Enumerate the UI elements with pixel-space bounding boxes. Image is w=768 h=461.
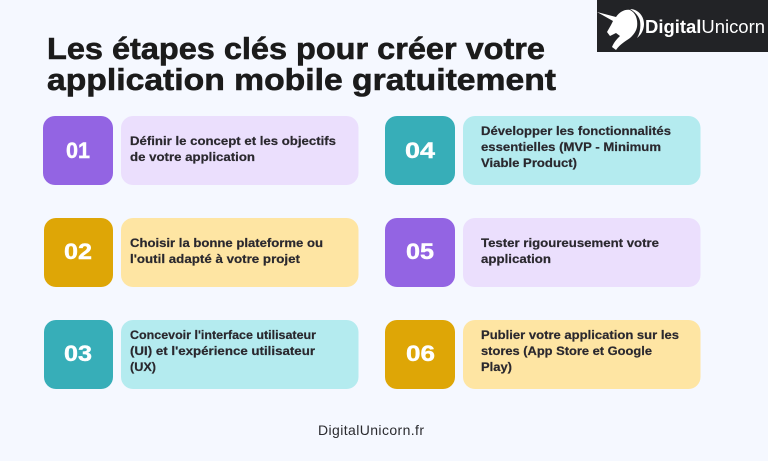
card 06 <box>463 320 700 389</box>
card 05 <box>463 218 700 287</box>
card 02: l'outil adapté à votre projet <box>130 252 300 266</box>
number badge 06 <box>385 320 455 389</box>
step 05 <box>385 218 700 287</box>
card 04: essentielles (MVP - Minimum <box>481 140 661 154</box>
step 01 <box>43 116 358 185</box>
card 02: Choisir la bonne plateforme ou <box>130 236 323 250</box>
card 03: Concevoir l'interface utilisateur <box>130 328 316 342</box>
number badge 05 <box>385 218 455 287</box>
number badge 06: 06 <box>406 341 435 366</box>
card 06: stores (App Store et Google <box>481 344 652 358</box>
step 03 <box>44 320 358 389</box>
card 01: Définir le concept et les objectifs <box>130 134 336 148</box>
logo wordmark: DigitalUnicorn <box>645 17 765 37</box>
number badge 02: 02 <box>64 239 92 264</box>
number badge 03 <box>44 320 113 389</box>
footer url: DigitalUnicorn.fr <box>318 422 424 438</box>
card 03: (UX) <box>130 360 156 374</box>
number badge 01 <box>43 116 113 185</box>
step 02 <box>44 218 358 287</box>
number badge 05: 05 <box>406 239 434 264</box>
title <box>47 31 556 97</box>
step 06 <box>385 320 700 389</box>
card 01 <box>121 116 358 185</box>
number badge 04: 04 <box>405 138 436 163</box>
card 06: Publier votre application sur les <box>481 328 679 342</box>
card 02 <box>121 218 358 287</box>
card 03: (UI) et l'expérience utilisateur <box>130 344 315 358</box>
step 04 <box>385 116 700 185</box>
card 05: application <box>481 252 551 266</box>
logo <box>597 0 768 52</box>
card 01: de votre application <box>130 150 255 164</box>
number badge 04 <box>385 116 455 185</box>
number badge 01: 01 <box>66 138 90 163</box>
title: application mobile gratuitement <box>47 62 556 97</box>
icon: unicorn head <box>597 9 644 50</box>
card 06: Play) <box>481 360 512 374</box>
number badge 03: 03 <box>64 341 92 366</box>
card 03 <box>121 320 358 389</box>
card 04: Viable Product) <box>481 156 577 170</box>
number badge 02 <box>44 218 113 287</box>
card 05: Tester rigoureusement votre <box>481 236 659 250</box>
title: Les étapes clés pour créer votre <box>47 31 545 66</box>
card 04 <box>463 116 700 185</box>
card 04: Développer les fonctionnalités <box>481 124 671 138</box>
